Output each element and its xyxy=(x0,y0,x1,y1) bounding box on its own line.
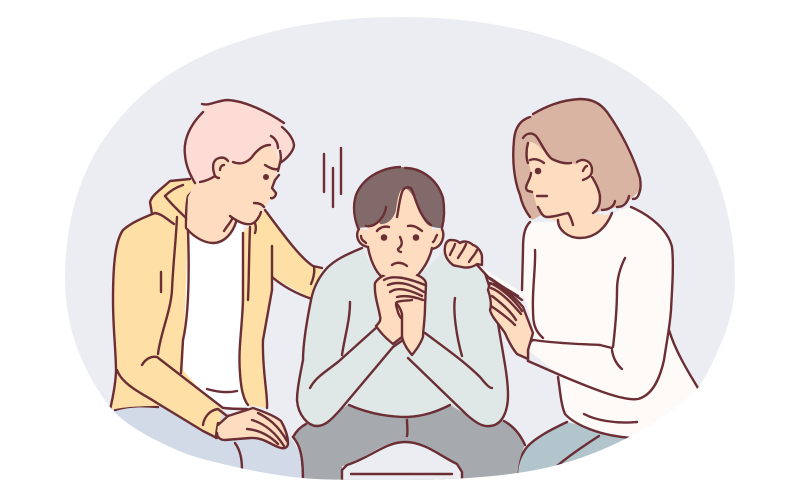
woman hand on arm xyxy=(488,283,533,359)
illustration: two friends comforting a sad man xyxy=(65,17,735,480)
background blob xyxy=(65,17,735,480)
chair seat xyxy=(340,440,464,480)
icon: falling gloom lines xyxy=(324,148,341,207)
white shirt xyxy=(180,222,248,410)
hoodie sleeve xyxy=(117,357,227,438)
torso xyxy=(297,248,508,426)
figure: woman upper body xyxy=(445,99,700,440)
figure: seated sad man xyxy=(293,167,525,490)
trousers left man xyxy=(113,406,304,478)
white cuff strand xyxy=(476,265,524,305)
sweater xyxy=(522,207,700,440)
woman hair and head xyxy=(513,99,641,238)
figure: man in yellow hoodie xyxy=(108,100,322,490)
all figures clipped to blob xyxy=(108,99,700,490)
left man head xyxy=(185,100,294,243)
woman trousers xyxy=(516,420,628,474)
lower shirt crease xyxy=(207,389,237,392)
woman hand on seated man's shoulder xyxy=(445,240,482,268)
grey trousers xyxy=(292,404,526,480)
sad man head xyxy=(354,167,444,276)
clasped hands xyxy=(375,271,426,355)
hoodie body xyxy=(110,179,322,410)
figure: woman in white sweater, lower body xyxy=(516,420,628,474)
left man hand on knee xyxy=(217,408,288,448)
